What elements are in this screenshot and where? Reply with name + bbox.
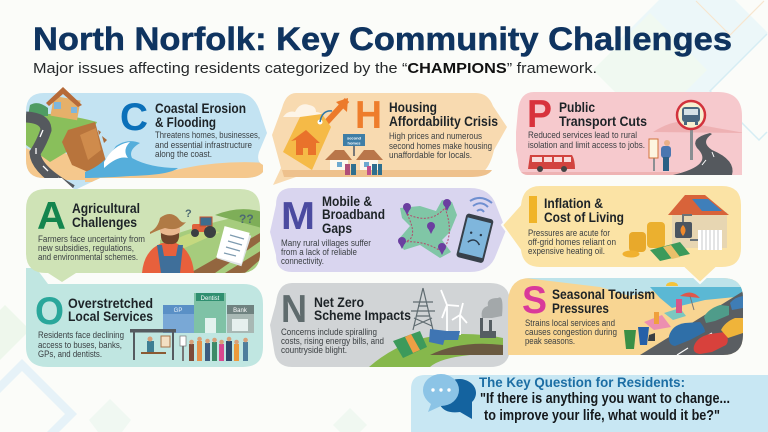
heading [72, 201, 140, 230]
icon: local buildings: GP [174, 308, 182, 314]
icon: house with solar roof and radiator [668, 195, 729, 250]
panel: housing affordability crisis [272, 93, 507, 185]
title: North Norfolk: Key Community Challenges [33, 21, 732, 57]
heading: Mobile & [322, 194, 372, 209]
description: Strains local services and [525, 318, 615, 329]
icon: second homes sign and houses: second [347, 136, 362, 140]
heading: Pressures [552, 301, 609, 316]
icon: second homes sign and houses [325, 134, 383, 175]
heading [552, 287, 655, 316]
heading: Affordability Crisis [389, 114, 498, 129]
icon: beach, sea and road [525, 278, 745, 355]
icon: local buildings [163, 293, 254, 333]
icon: wifi signal [470, 198, 492, 212]
description: unaffordable for locals. [389, 150, 472, 161]
description: expensive heating oil. [528, 246, 605, 257]
callout heading: The Key Question for Residents: [479, 374, 685, 390]
icon: map with pins [398, 199, 457, 258]
icon: second homes sign and houses: homes [348, 140, 361, 146]
panel: net zero scheme impacts [270, 283, 510, 367]
icon: local buildings: Dentist [201, 296, 220, 302]
heading [155, 101, 246, 130]
description [38, 330, 124, 360]
question line 1: "If there is anything you want to change... [480, 391, 730, 407]
description: and essential infrastructure [155, 140, 252, 151]
icon: tractor [191, 217, 216, 238]
panel background [272, 93, 507, 185]
letter O: O [35, 290, 64, 333]
panel: overstretched local services [26, 268, 263, 367]
icon: beach umbrella and towels [644, 292, 700, 330]
callout background [411, 375, 768, 432]
description [528, 228, 616, 257]
letter S: S [522, 279, 547, 322]
heading: & Flooding [155, 115, 216, 130]
panel background [508, 278, 743, 355]
icon: house on the cliff [46, 87, 107, 143]
heading: Housing [389, 100, 437, 115]
icon: farmer [142, 214, 194, 273]
description [155, 130, 260, 160]
icon: person at timetable [649, 139, 671, 171]
icon: question marks: ?? [239, 212, 254, 226]
icon: furrowed field [430, 344, 503, 355]
heading [389, 100, 498, 129]
icon: eroding coast with road [26, 103, 268, 190]
description: Threatens homes, businesses, [155, 130, 260, 141]
description: Reduced services lead to rural [528, 130, 637, 141]
panel background [270, 188, 506, 272]
icon: price tag with house and arrow [283, 98, 348, 170]
icon: red bus [528, 155, 575, 172]
icon: question marks [185, 208, 254, 226]
icon: recycling bins [624, 327, 655, 349]
icon: hills and road [520, 122, 745, 176]
description: isolation and limit access to jobs. [528, 140, 645, 151]
panel background [26, 93, 267, 190]
icon: coins and cash [622, 222, 690, 261]
panel: seasonal tourism pressures [508, 278, 745, 355]
icon: solar panels [429, 329, 460, 345]
letter N: N [281, 288, 307, 331]
icon: bus shelter [130, 329, 176, 360]
icon: speech bubbles [423, 374, 476, 419]
description [528, 130, 645, 151]
panel background [502, 185, 742, 283]
heading: Transport Cuts [559, 114, 647, 129]
icon: documents [216, 226, 251, 266]
heading [314, 295, 411, 323]
description: Farmers face uncertainty from [38, 234, 145, 245]
heading: Gaps [322, 221, 352, 236]
ground strip [282, 170, 492, 177]
subtitle: Major issues affecting residents categorized by the “ CHAMPIONS ” framework. [33, 60, 597, 77]
heading: Local Services [68, 309, 153, 324]
description: Residents face declining [38, 330, 124, 341]
panel: agricultural challenges [26, 189, 262, 282]
description: Pressures are acute for [528, 228, 611, 239]
description: and environmental schemes. [38, 252, 138, 263]
letter A: A [37, 195, 66, 238]
icon: factory with smoke [480, 297, 502, 338]
heading: Agricultural [72, 201, 140, 216]
panel: public transport cuts [516, 92, 745, 176]
description [525, 318, 617, 347]
description [281, 238, 372, 267]
letter I [529, 196, 537, 223]
letter M: M [281, 195, 315, 238]
panel: coastal erosion and flooding [26, 87, 268, 190]
heading: Coastal Erosion [155, 101, 246, 116]
panel background [270, 283, 510, 367]
letter H: H [355, 94, 382, 137]
callout: the key question for residents [411, 374, 768, 432]
description: GPs, and dentists. [38, 349, 102, 360]
description: Many rural villages suffer [281, 238, 372, 249]
description: along the coast. [155, 149, 212, 160]
description: connectivity. [281, 256, 324, 267]
heading: Broadband [322, 207, 385, 222]
panel: mobile and broadband gaps [270, 188, 506, 272]
heading: Cost of Living [544, 210, 624, 225]
description: off-grid homes reliant on [528, 237, 616, 248]
description [389, 131, 492, 161]
heading: Scheme Impacts [314, 308, 411, 323]
icon: fields [160, 209, 262, 273]
icon: queue of people [180, 336, 248, 361]
panel background [26, 189, 260, 282]
heading [68, 296, 153, 324]
description [38, 234, 145, 263]
heading: Overstretched [68, 296, 153, 311]
icon: cloud [283, 104, 322, 117]
question line 2: to improve your life, what would it be?" [484, 408, 720, 424]
panel background [26, 268, 263, 367]
heading [322, 194, 385, 236]
description: Concerns include spiralling [281, 327, 377, 338]
icon: question marks: ? [185, 208, 192, 220]
heading: Net Zero [314, 295, 364, 310]
letter P: P [527, 93, 552, 136]
icon: green hillside [369, 334, 503, 367]
heading: Challenges [72, 215, 137, 230]
panel background [516, 92, 742, 175]
heading: Seasonal Tourism [552, 287, 655, 302]
icon: wind turbines [441, 290, 467, 335]
description: High prices and numerous [389, 131, 482, 142]
icon: pylon [411, 288, 435, 330]
description: causes congestion during [525, 327, 617, 338]
description: from a lack of reliable [281, 247, 357, 258]
letter C: C [120, 96, 148, 139]
panel: inflation and cost of living [502, 185, 742, 283]
icon: phone with sad face [456, 213, 494, 263]
heading: Public [559, 100, 595, 115]
heading: Inflation & [544, 196, 603, 211]
description: costs, rising energy bills, and [281, 336, 384, 347]
icon: local buildings: Bank [233, 308, 248, 314]
description: new subsidies, regulations, [38, 243, 134, 254]
description: countryside blight. [281, 345, 347, 356]
description: second homes make housing [389, 141, 492, 152]
icon: cars [669, 296, 743, 354]
heading [544, 196, 624, 225]
description [281, 327, 384, 356]
icon: bus stop sign [677, 101, 705, 160]
heading [559, 100, 647, 129]
icon: sun [666, 282, 678, 286]
icon: stack of cash [393, 331, 427, 358]
description: peak seasons. [525, 336, 575, 347]
description: access to buses, banks, [38, 340, 122, 351]
